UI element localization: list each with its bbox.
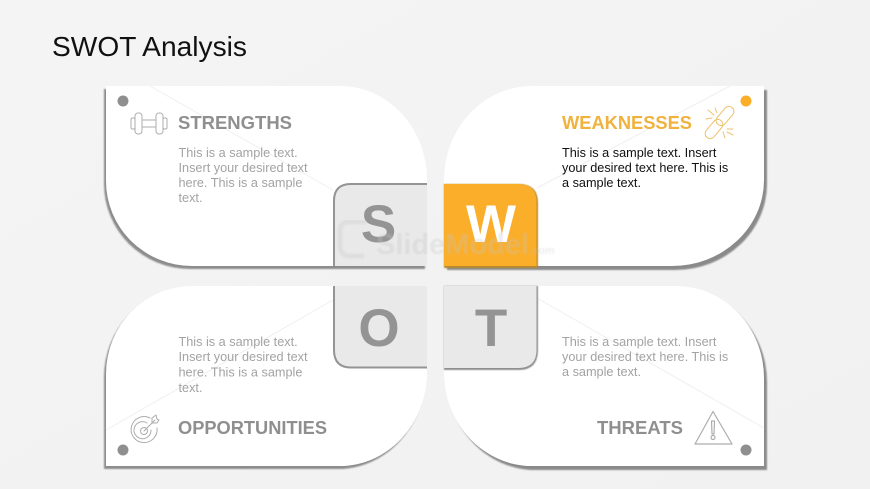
icon: dumbbell: [131, 113, 167, 134]
heading: STRENGTHS: [178, 113, 292, 133]
panel: threats: [444, 286, 767, 470]
text block: This is a sample text.: [178, 335, 298, 349]
text block: This is a sample text. Insert: [562, 335, 717, 349]
heading: OPPORTUNITIES: [178, 418, 327, 438]
text block: This is a sample text. Insert: [562, 146, 717, 160]
tile: S: [333, 183, 427, 266]
text block: here. This is a sample: [178, 176, 302, 190]
dot: [118, 96, 128, 106]
text block: your desired text here. This is: [562, 350, 728, 364]
panel: strengths: [104, 86, 427, 269]
title: SWOT Analysis: [52, 31, 247, 62]
tile: W: [444, 184, 538, 268]
dot: [118, 444, 128, 456]
text block: text.: [178, 191, 202, 205]
tile: S: S: [361, 195, 396, 254]
tile: W: W: [466, 195, 516, 254]
text block: This is a sample text.: [178, 146, 298, 160]
dot: [740, 444, 752, 456]
tile: O: [333, 286, 427, 368]
tile: T: [444, 286, 538, 370]
icon: warning triangle: [695, 412, 732, 444]
text block: a sample text.: [562, 176, 641, 190]
heading: WEAKNESSES: [562, 113, 692, 133]
text block: here. This is a sample: [178, 366, 302, 380]
dot: [740, 96, 752, 106]
tile: O: O: [358, 299, 400, 358]
heading: THREATS: [597, 418, 683, 438]
text block: Insert your desired text: [178, 350, 308, 364]
text block: Insert your desired text: [178, 161, 308, 175]
watermark: SlideModel.com: [376, 229, 555, 261]
panel: opportunities: [104, 286, 427, 469]
text block: a sample text.: [562, 365, 641, 379]
icon: target: [131, 415, 159, 443]
text block: text.: [178, 381, 202, 395]
text block: your desired text here. This is: [562, 161, 728, 175]
panel: weaknesses: [444, 86, 767, 270]
tile: T: T: [475, 299, 507, 358]
icon: broken chain: [703, 104, 736, 141]
watermark: [340, 222, 555, 261]
